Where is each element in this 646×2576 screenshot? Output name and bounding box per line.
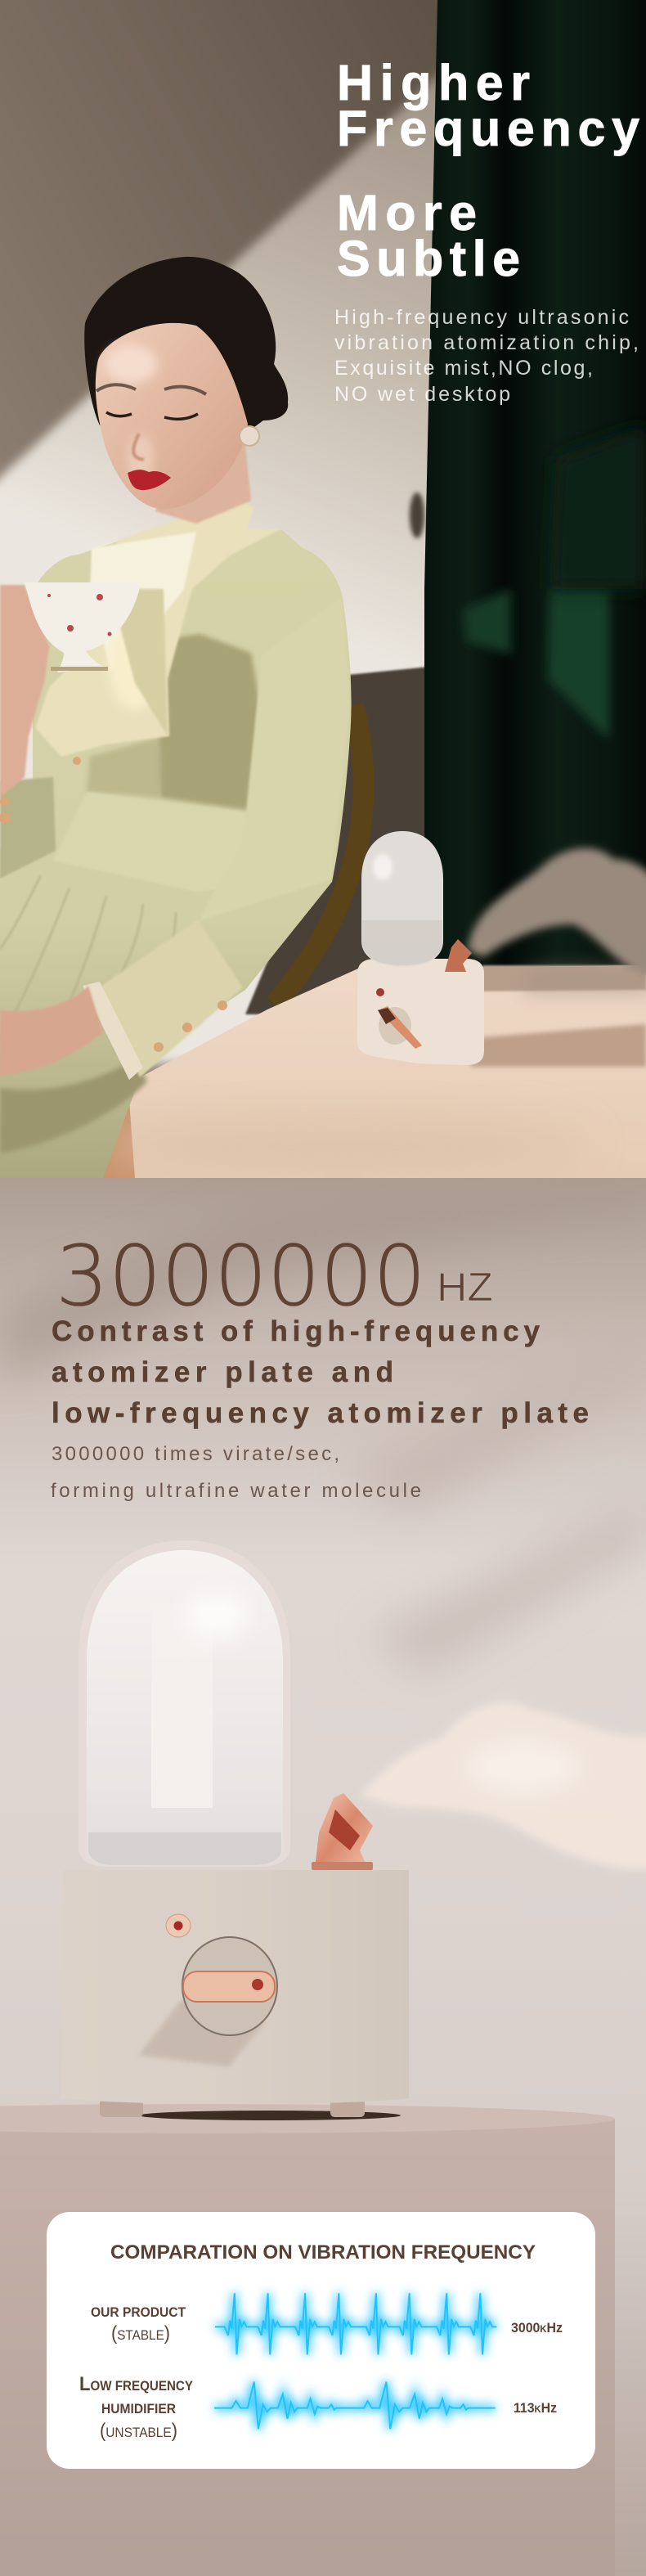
nose shadow (133, 434, 144, 460)
value: 3000 kHz: 3000KHz (511, 2320, 563, 2335)
small humidifier (357, 831, 484, 1065)
neck (155, 444, 252, 524)
dial (182, 1937, 277, 2035)
buttons (0, 757, 227, 1052)
skirt pleats (0, 875, 177, 1010)
base shadow (139, 2000, 266, 2066)
label: low frequency humidifier: LOW FREQUENCY (79, 2373, 193, 2395)
base (61, 1870, 409, 2104)
section heading: Contrast of high-frequency (52, 1315, 541, 1347)
title: higher frequency more subtle: Higher (337, 55, 530, 110)
lips (128, 470, 171, 490)
dome (79, 1540, 290, 1867)
bodice shade (87, 736, 164, 798)
description text: vibration atomization chip, (334, 331, 639, 354)
dial (379, 1007, 411, 1045)
belt (87, 792, 242, 815)
title: higher frequency more subtle: Frequency (337, 101, 639, 156)
section heading: atomizer plate and (52, 1356, 393, 1388)
description text: NO wet desktop (334, 383, 510, 406)
panel: comparison card (47, 2212, 595, 2469)
hand upper (0, 585, 49, 798)
section heading (52, 1315, 589, 1429)
face (96, 323, 248, 509)
indicator (166, 1914, 191, 1937)
earring (240, 426, 259, 446)
large mist (360, 1702, 646, 1870)
nozzle (312, 1793, 373, 1870)
title: higher frequency more subtle (337, 55, 639, 286)
collar lace and bow (35, 499, 280, 757)
nozzle (445, 939, 472, 972)
panel: lifestyle photo (0, 0, 646, 1178)
card title: COMPARATION ON VIBRATION FREQUENCY (110, 2241, 536, 2264)
lower skirt fold (0, 1059, 147, 1153)
teacup (25, 582, 141, 672)
label: low frequency humidifier: HUMIDIFIER (101, 2402, 176, 2416)
hand lower (0, 986, 103, 1076)
chair (275, 705, 364, 1005)
description text: Exquisite mist,NO clog, (334, 357, 593, 380)
panel: frequency section (0, 1178, 646, 2576)
dome (361, 831, 443, 967)
cuff lace (83, 982, 143, 1080)
section background (0, 1178, 646, 2576)
description text (334, 306, 639, 406)
wall background (0, 0, 437, 1105)
cuff (99, 919, 243, 1077)
section heading: low-frequency atomizer plate (52, 1397, 589, 1429)
table (98, 965, 646, 1178)
chart: unstable waveform (214, 2382, 496, 2429)
title: higher frequency more subtle: More (337, 185, 477, 241)
label: our product: (STABLE) (111, 2322, 170, 2344)
big number 3000000 Hz: HZ (437, 1266, 493, 1310)
base (357, 959, 484, 1065)
indicator (376, 988, 384, 996)
description text: High-frequency ultrasonic (334, 306, 629, 329)
woman: head (84, 257, 288, 509)
label: low frequency humidifier (79, 2373, 193, 2442)
curtain (410, 0, 646, 1014)
feet (100, 2098, 365, 2117)
hair (84, 257, 288, 434)
label: our product (91, 2305, 186, 2344)
title: higher frequency more subtle: Subtle (337, 231, 520, 286)
woman: dress (0, 499, 352, 1178)
eyes (106, 412, 198, 419)
large humidifier (61, 1540, 409, 2117)
mist (468, 848, 646, 994)
label: low frequency humidifier: (UNSTABLE) (100, 2420, 177, 2442)
chart: stable waveform (215, 2293, 496, 2354)
section subtext: forming ultrafine water molecule (51, 1480, 421, 1502)
brows (96, 384, 206, 394)
section subtext (51, 1443, 421, 1502)
sleeve highlight (247, 686, 352, 811)
left sleeve (0, 777, 56, 879)
label: our product: OUR PRODUCT (91, 2305, 186, 2320)
section subtext: 3000000 times virate/sec, (52, 1443, 339, 1465)
pedestal (0, 2104, 615, 2576)
big number 3000000 Hz: 3000000 (56, 1228, 426, 1325)
value: 113 kHz: 113KHz (514, 2400, 557, 2416)
chest shadow (159, 634, 260, 810)
